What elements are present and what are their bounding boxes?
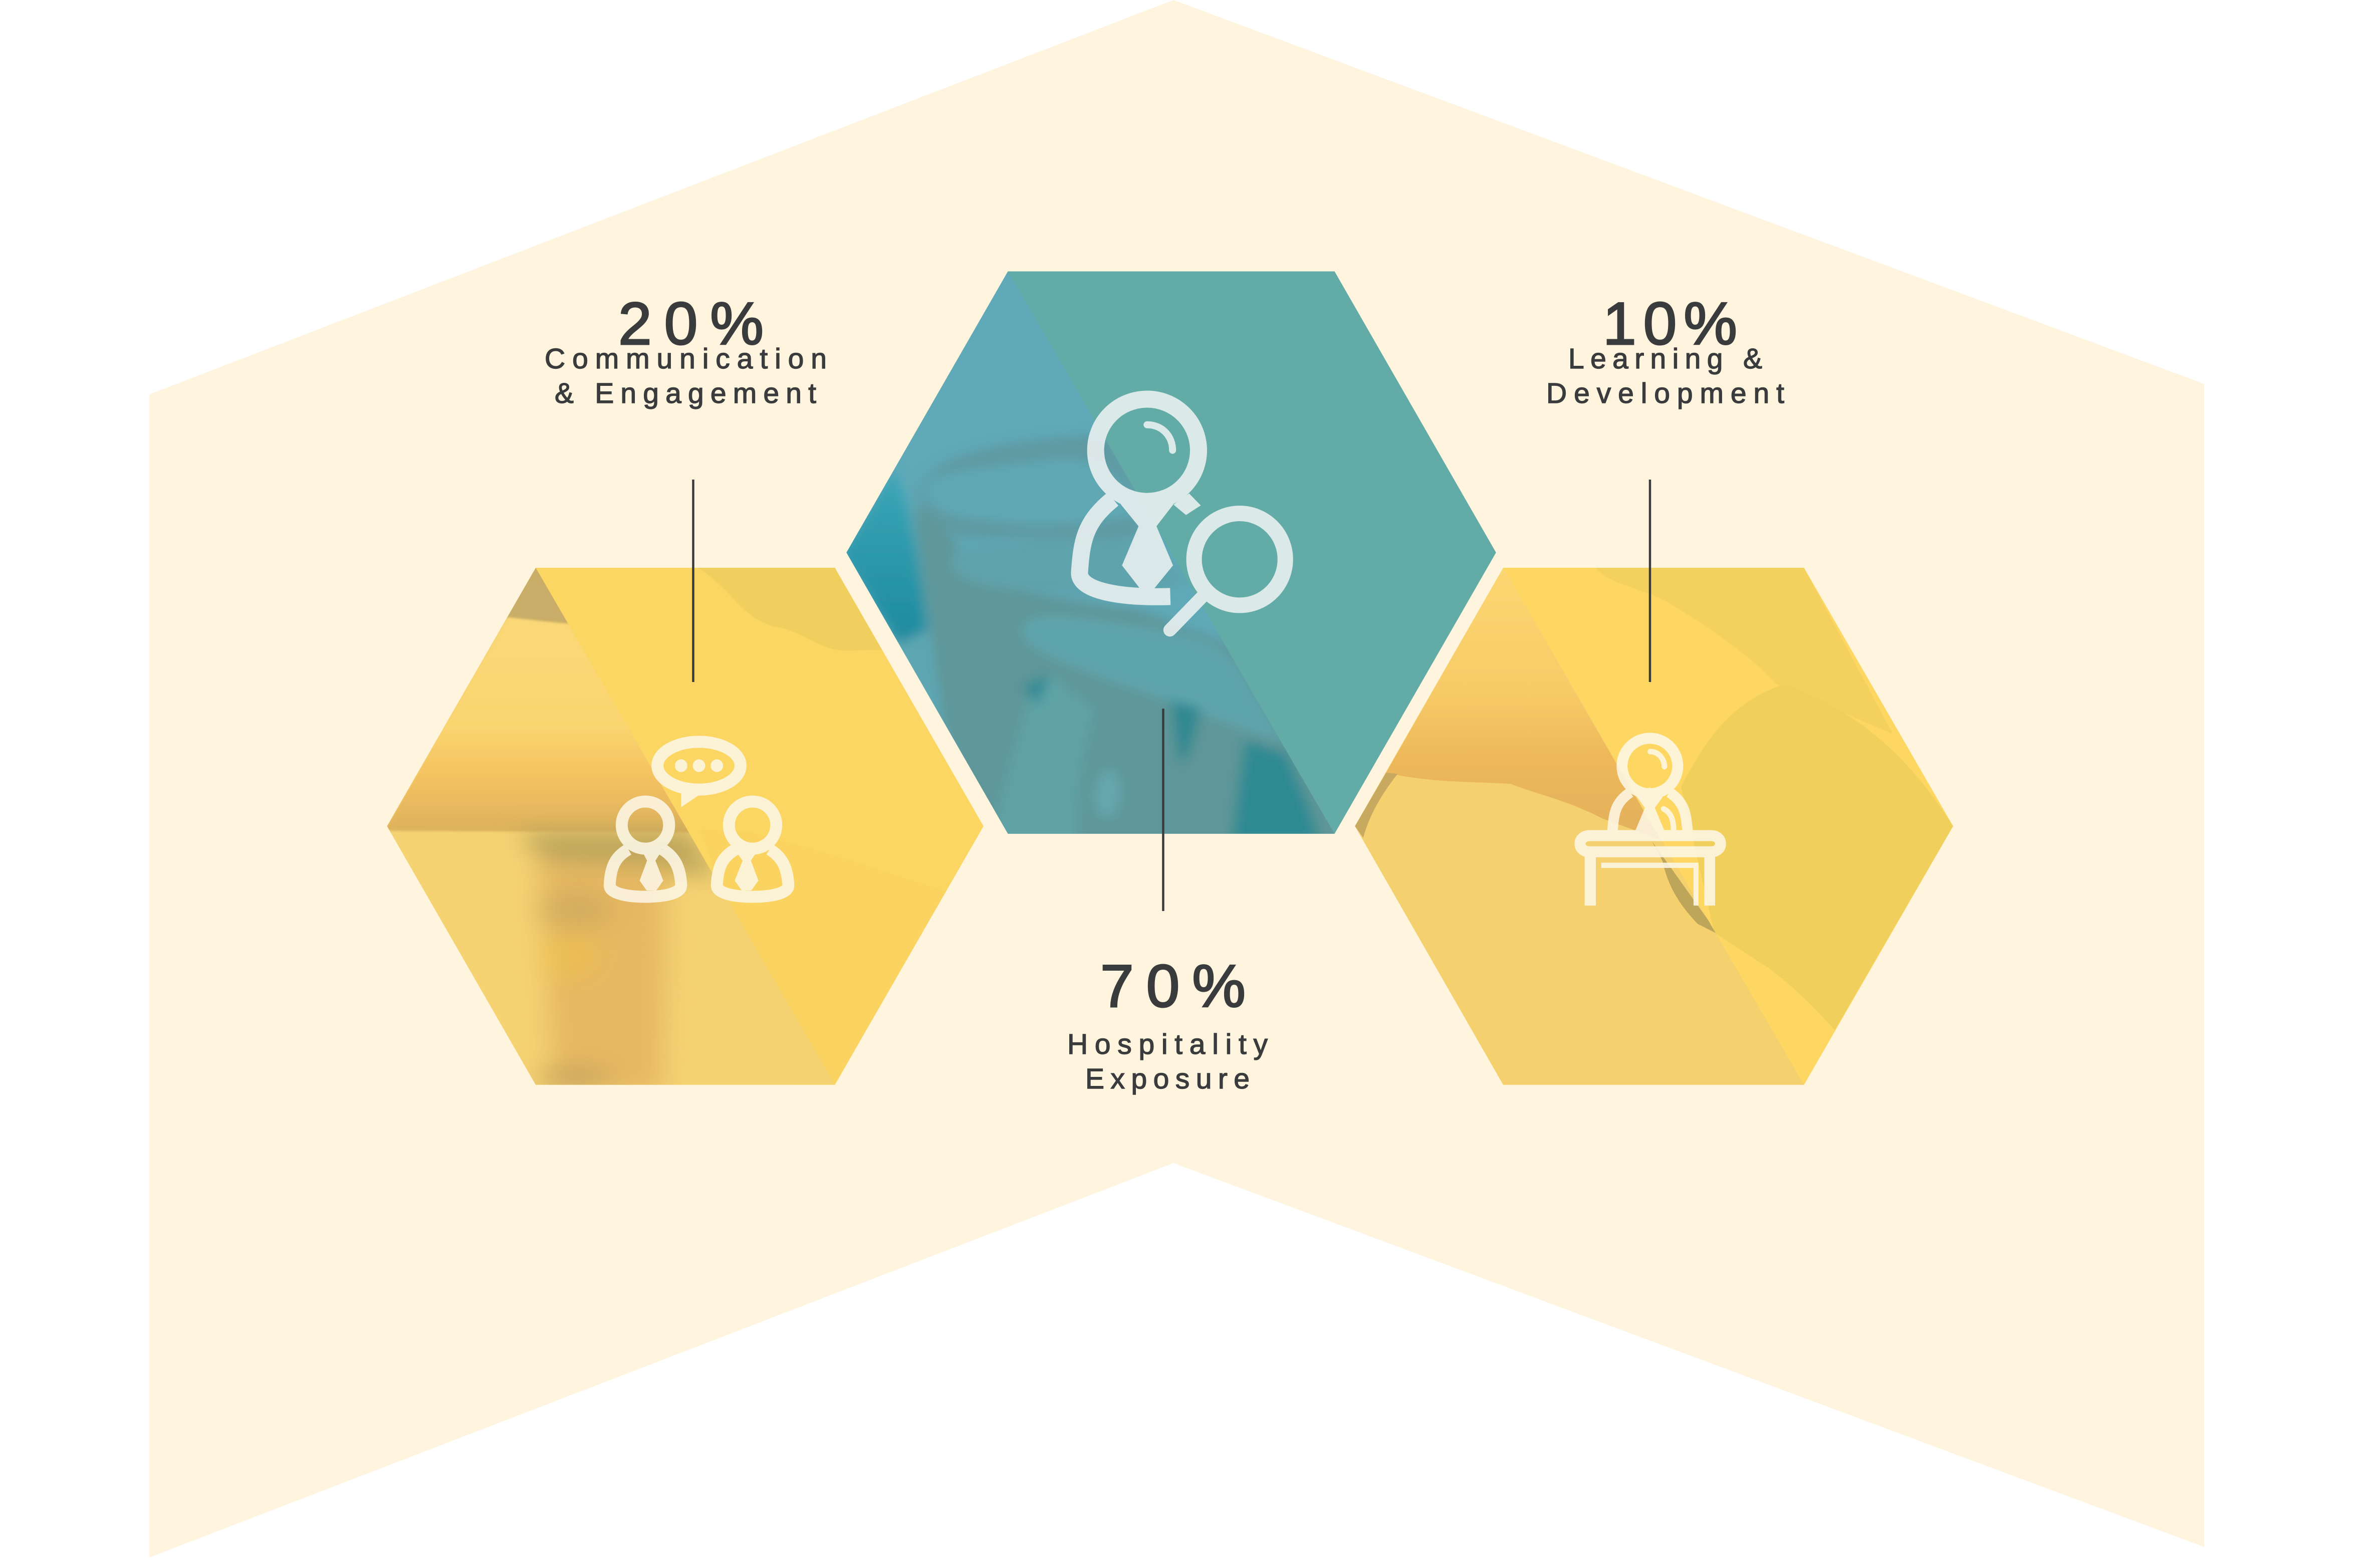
connector line: centre bbox=[1162, 709, 1164, 911]
panel: centre hexagon bbox=[846, 272, 1496, 834]
panel: right hexagon bbox=[1355, 568, 1953, 1085]
label: 70% Hospitality Exposure bbox=[1067, 953, 1268, 1095]
person two bbox=[717, 801, 788, 897]
icon: person at desk bbox=[1580, 738, 1721, 906]
label: 20% Communication & Engagement: & Engagement bbox=[555, 377, 816, 409]
label: 20% Communication & Engagement: Communication bbox=[545, 343, 827, 375]
icon: person with magnifying glass bbox=[1079, 399, 1285, 630]
person one bbox=[610, 801, 681, 897]
label: 70% Hospitality Exposure: 70% bbox=[1100, 953, 1246, 1020]
label: 70% Hospitality Exposure: Hospitality bbox=[1067, 1028, 1268, 1060]
connector line: left bbox=[692, 480, 694, 682]
label: 20% Communication & Engagement: 20% bbox=[618, 290, 764, 357]
label: 10% Learning & Development: 10% bbox=[1603, 290, 1737, 357]
label: 20% Communication & Engagement bbox=[545, 290, 827, 409]
label: 70% Hospitality Exposure: Exposure bbox=[1085, 1063, 1250, 1095]
speech bubble bbox=[657, 742, 741, 807]
panel: left hexagon bbox=[387, 568, 984, 1085]
icon: two people talking bbox=[610, 742, 788, 897]
label: 10% Learning & Development bbox=[1546, 290, 1784, 409]
label: 10% Learning & Development: Learning & bbox=[1568, 343, 1762, 375]
label: 10% Learning & Development: Development bbox=[1546, 377, 1784, 409]
connector line: right bbox=[1649, 480, 1651, 682]
